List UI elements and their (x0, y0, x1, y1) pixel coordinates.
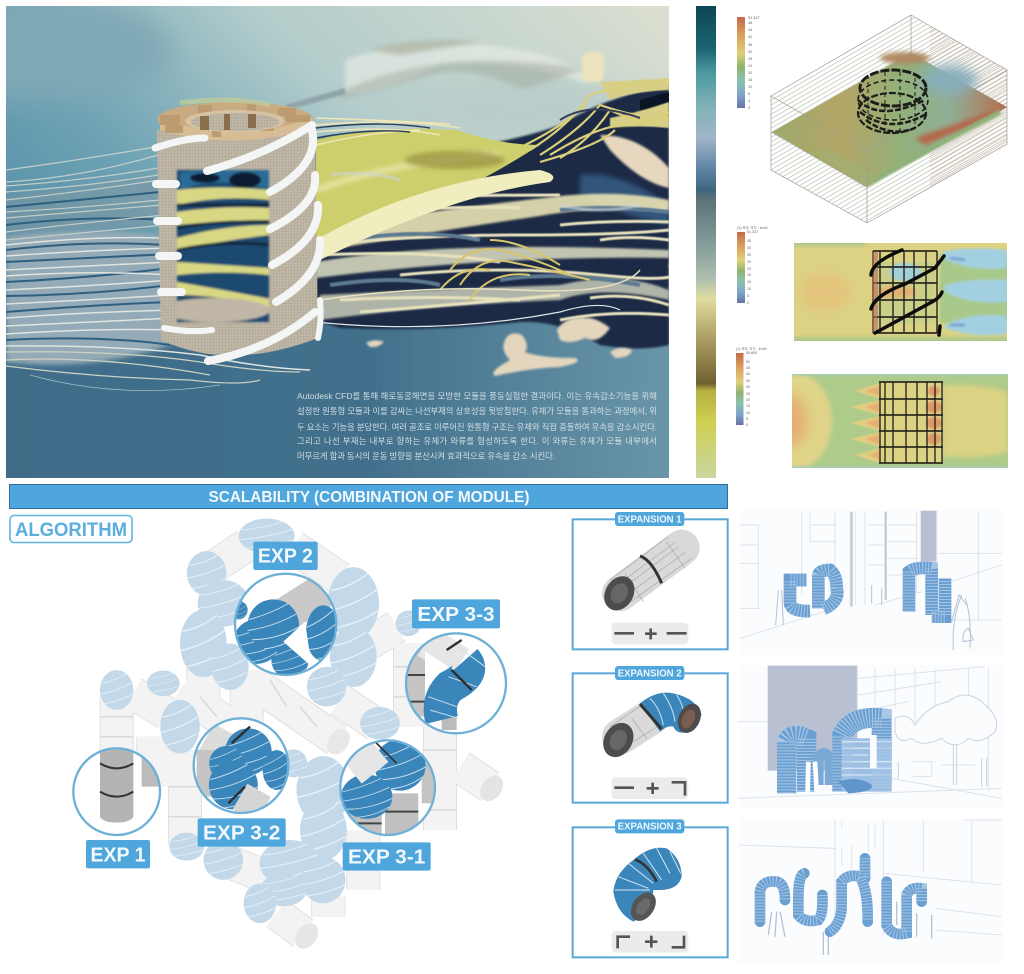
callout: EXP 2 (229, 574, 341, 679)
legend: section 1 velocity scale: 0 (747, 301, 749, 305)
legend: 3D velocity scale: 40 (748, 35, 752, 39)
legend: 3D velocity scale: 0 (748, 106, 750, 110)
description text: 그리고 나선 부재는 내부로 향하는 유체가 와류를 형성하도록 한다. 이 와류는 유체가 모듈 내부에서 (297, 436, 657, 446)
dark turbulent wake (316, 78, 676, 348)
chart: CFD section with helix (794, 243, 1007, 341)
legend: 3D velocity scale: 48 (748, 21, 752, 25)
faded tube structure (100, 518, 508, 953)
description text: 머무르게 함과 동시의 운동 방향을 분산시켜 효과적으로 유속을 감소 시킨다. (297, 451, 555, 461)
heading: algorithm: ALGORITHM (15, 520, 127, 541)
scene 2 (738, 665, 1003, 808)
legend: 3D velocity scale: 36 (748, 43, 752, 47)
legend: section 2 velocity scale: 0 (746, 423, 748, 427)
legend: section 1 velocity scale: 15 (747, 280, 751, 284)
legend: 3D velocity scale (737, 16, 760, 110)
label tags: EXP 3-1 (348, 847, 425, 869)
scene 3 (738, 818, 1003, 963)
left streamlines (6, 147, 310, 391)
legend: section 1 velocity scale: 40 (747, 246, 751, 250)
legend: section 2 velocity scale: 20 (746, 398, 750, 402)
chart: 3D CFD wind tunnel box (771, 15, 1007, 223)
legend: 3D velocity scale: 51.337 (748, 16, 760, 20)
panel: CFD wind flow render (6, 6, 669, 478)
description text (297, 391, 657, 461)
label tags: EXP 3-2 (203, 823, 280, 845)
legend: 3D velocity scale: 24 (748, 64, 752, 68)
description text: 두 요소는 기능을 분담한다. 여러 골조로 이루어진 원통형 구조는 유체와 직접 충돌하여 유속을 감소시킨다. (297, 422, 657, 432)
legend: 3D velocity scale: 44 (748, 28, 752, 32)
legend: 3D velocity scale: 28 (748, 57, 752, 61)
panel: expansion 2: EXPANSION 2 (618, 668, 682, 679)
legend: section 2 velocity scale: 45 (746, 366, 750, 370)
label tags (86, 542, 500, 871)
callout: EXP 3-2 (194, 718, 291, 813)
legend: section 2 velocity scale: 35 (746, 379, 750, 383)
legend: section 1 velocity scale: 35 (747, 253, 751, 257)
colour palette bar (696, 6, 716, 478)
legend: section 2 velocity scale: 5 (746, 417, 748, 421)
legend: section 1 velocity scale (737, 225, 768, 305)
legend: 3D velocity scale: 4 (748, 99, 750, 103)
legend: section 2 velocity scale: 15 (746, 404, 750, 408)
legend: section 1 velocity scale: 5 (747, 294, 749, 298)
diagram: isometric module combination (73, 518, 508, 953)
legend: section 2 velocity scale: 40 (746, 372, 750, 376)
legend: section 2 velocity scale: 55.690 (746, 351, 757, 355)
label tags: EXP 1 (90, 844, 145, 866)
legend: section 2 velocity scale: 30 (746, 385, 750, 389)
legend: section 1 velocity scale: (1) 속도 크기 - km/h (737, 225, 768, 230)
street scene sketches (738, 510, 1003, 963)
legend: 3D velocity scale: 16 (748, 78, 752, 82)
legend: section 1 velocity scale: 25 (747, 267, 751, 271)
module tower (155, 100, 321, 361)
panel: expansion 1 (573, 512, 728, 649)
callout: EXP 3-1 (340, 739, 435, 840)
legend: section 1 velocity scale: 10 (747, 287, 751, 291)
label tags: EXP 2 (258, 546, 313, 568)
scene 1 (740, 510, 1003, 655)
legend: section 1 velocity scale: 51.337 (747, 230, 758, 234)
callout: EXP 3-3 (406, 633, 506, 733)
legend: section 1 velocity scale: 20 (747, 273, 751, 277)
legend: section 1 velocity scale: 45 (747, 239, 751, 243)
legend: section 2 velocity scale: 50 (746, 360, 750, 364)
legend: section 1 velocity scale: 30 (747, 260, 751, 264)
description text: Autodesk CFD를 통해 해로동굴해면을 모방한 모듈을 풍동실험한 결과이다. 이는 유속감소기능을 위해 (297, 391, 657, 401)
panel: expansion 2 (573, 666, 728, 803)
legend: section 2 velocity scale: (1) 속도 크기 - km/h (736, 346, 767, 351)
label tags: EXP 3-3 (417, 604, 495, 626)
legend: 3D velocity scale: 32 (748, 50, 752, 54)
beige flow blobs (366, 318, 632, 376)
heading bar: scalability (10, 484, 728, 508)
legend: 3D velocity scale: 12 (748, 85, 752, 89)
chart: CFD section grid only (792, 374, 1008, 468)
heading bar: scalability: SCALABILITY (COMBINATION OF MODULE) (208, 489, 530, 506)
legend: 3D velocity scale: 8 (748, 92, 750, 96)
callout: EXP 1 (73, 747, 160, 835)
panel: expansion 1: EXPANSION 1 (618, 514, 682, 525)
panel: expansion 3: EXPANSION 3 (618, 822, 682, 833)
description text: 설정한 원통형 모듈과 이를 감싸는 나선부재의 상호성을 뒷받침한다. 유체가 모듈을 통과하는 과정에서, 위 (297, 406, 657, 416)
legend: section 2 velocity scale (736, 346, 767, 427)
legend: section 2 velocity scale: 25 (746, 392, 750, 396)
legend: section 2 velocity scale: 10 (746, 411, 750, 415)
white helical tube (155, 125, 321, 361)
module top ring (157, 100, 313, 141)
legend: 3D velocity scale: 20 (748, 71, 752, 75)
panel: expansion 3 (573, 819, 728, 957)
